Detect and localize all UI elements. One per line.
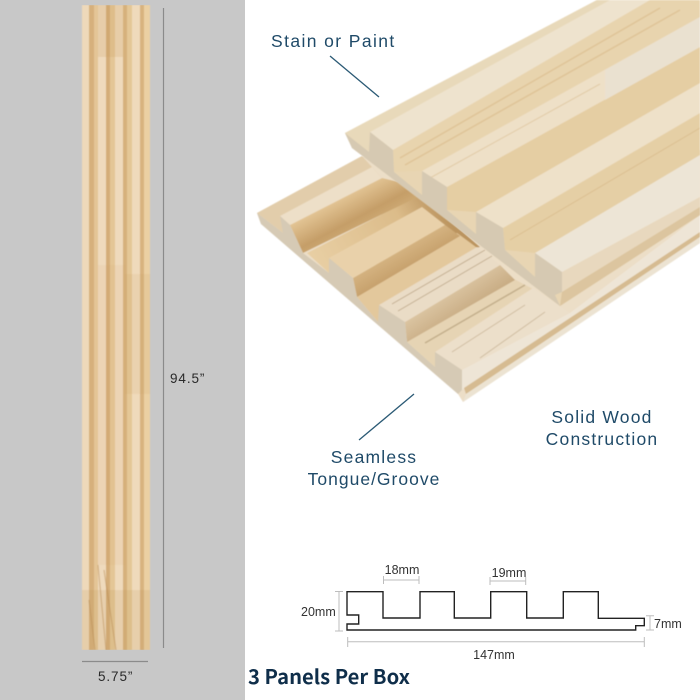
callout: solid wood: Solid Wood <box>551 407 653 427</box>
dimension: 20mm <box>301 592 343 631</box>
width dimension line <box>82 660 148 662</box>
dimension: 18mm: 18mm <box>385 563 419 577</box>
callout: solid wood: Construction <box>546 429 658 449</box>
width label: 5.75” <box>98 669 133 684</box>
lower panel back strip <box>257 156 382 233</box>
lower rib D and tongue strip <box>435 215 700 402</box>
wood panel front view <box>82 5 150 650</box>
dimension: 20mm: 20mm <box>301 605 336 619</box>
height dimension line <box>162 8 164 648</box>
callout: tongue and groove: Seamless <box>331 447 417 467</box>
height label: 94.5” <box>170 371 205 386</box>
upper rib 1 <box>345 0 700 172</box>
upper rib 2 <box>422 17 700 212</box>
lower rib A <box>280 167 480 273</box>
lower rib B <box>329 207 480 322</box>
callout: tongue and groove <box>308 394 440 489</box>
lower end grain <box>257 213 462 394</box>
upper end grain <box>345 132 562 306</box>
dimension: 7mm: 7mm <box>654 617 682 631</box>
callout: stain or paint: Stain or Paint <box>271 31 396 51</box>
profile diagram <box>301 563 682 662</box>
dimension: 18mm <box>384 563 419 584</box>
upper rib 3 <box>476 83 700 253</box>
gray background panel <box>0 0 245 700</box>
dimension: 147mm <box>348 637 644 662</box>
callout: stain or paint <box>271 31 396 97</box>
callout: tongue and groove: Tongue/Groove <box>308 469 440 489</box>
callout: solid wood <box>546 407 658 449</box>
lower rib C <box>379 247 535 367</box>
heading: panels per box: 3 Panels Per Box <box>248 661 410 690</box>
dimension: 19mm: 19mm <box>492 566 526 580</box>
photo: upper wood panel <box>345 0 700 306</box>
photo: lower wood panel <box>257 150 700 402</box>
upper rib 4 <box>535 155 700 306</box>
upper panel base <box>345 0 700 306</box>
dimension: 147mm: 147mm <box>473 648 515 662</box>
lower panel silhouette <box>257 150 700 402</box>
panel cross-section outline <box>347 592 644 630</box>
